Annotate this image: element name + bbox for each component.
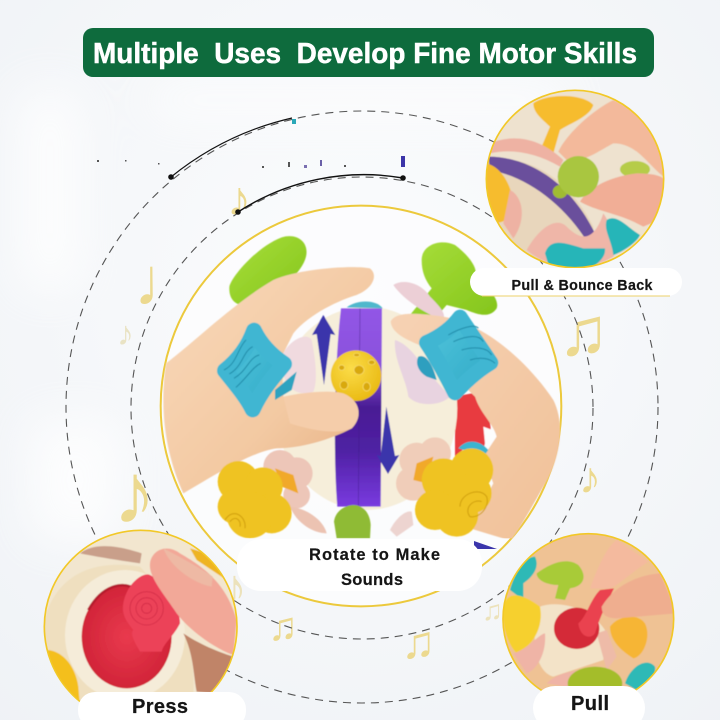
label: press: Press [132,696,188,718]
label: pull and bounce back: Pull & Bounce Back [512,278,653,294]
pink petals [513,633,545,673]
red cup [554,608,599,649]
green top-left knob [229,236,307,306]
left blue star [224,331,297,409]
circle: press photo [44,530,238,702]
lower right pink petal [390,511,413,537]
orange knob [533,96,593,153]
purple band [335,308,382,507]
teal knobs [544,242,606,267]
red stem [578,588,614,637]
label: pull: Pull [571,693,609,715]
green knob [537,561,584,600]
toy and hands [163,236,560,541]
arrow down [377,407,399,474]
central toy illustration [161,206,561,606]
music notes: ♪ [113,446,156,542]
right blue star [417,317,495,393]
pink petals [503,190,522,238]
arrow up [312,315,335,385]
ball body [276,307,457,510]
music notes: ♫ [558,294,609,370]
cream inner ring [65,570,185,700]
right yellow flower [415,448,493,537]
scattered specks [97,119,405,168]
left yellow flower [218,461,292,538]
music notes: ♫ [401,616,436,668]
title banner [83,28,654,77]
moon ball [331,350,381,401]
pink rim [490,138,563,167]
cream ball [45,565,194,700]
lilac petal top [393,282,444,320]
thumb [150,549,237,655]
finger lower [580,173,670,227]
label: rotate to make sounds: Rotate to Make [309,546,440,564]
red back part [455,393,493,457]
green bottom [568,667,622,700]
circle: pull and bounce back photo [486,90,664,268]
label: press [78,692,246,720]
music notes: ♪ [117,315,134,353]
dark gap [183,633,233,693]
small teal behind [458,442,488,457]
music notes: ♩ [134,244,202,320]
cup [535,604,605,677]
yellow ring [161,206,561,606]
background strip [80,546,142,563]
music notes: ♫ [268,605,298,649]
dashed orbit rings [66,111,658,703]
red base [82,585,172,688]
teal cap [347,301,383,308]
label: pull and bounce back [470,268,682,296]
purple band [488,157,597,243]
label: rotate to make sounds [237,539,482,591]
right pink flower [396,437,451,501]
teal bottom [625,663,655,690]
spiral [130,592,163,625]
circle: pull photo [490,520,690,720]
orange knob [610,617,647,658]
green small ball back [620,161,650,178]
fingers [590,540,648,588]
red knob [123,574,180,652]
label: pull [533,686,645,720]
ball side [487,159,593,260]
blue speck [474,541,497,549]
left hand [163,267,374,493]
green top-right knob [410,242,497,317]
yellow flower left [487,164,511,223]
green bottom knob [334,505,371,538]
right hand [391,314,560,541]
left pink flower [263,450,327,533]
music notes [113,173,609,668]
yellow flower [503,595,541,653]
fingertip over ball [283,392,359,431]
music notes: ♫ [482,595,503,626]
music notes: ♪ [579,454,601,503]
green ball [553,185,567,198]
right lilac petal [395,340,450,404]
yellow bits [47,650,80,707]
music notes: ♪ [221,559,247,617]
teal knob [510,557,537,600]
music notes: ♪ [227,173,251,226]
left lilac petal [283,337,316,393]
title banner: Multiple Uses Develop Fine Motor Skills [93,38,637,70]
finger upper [558,100,667,177]
label: rotate to make sounds: Sounds [341,571,403,589]
